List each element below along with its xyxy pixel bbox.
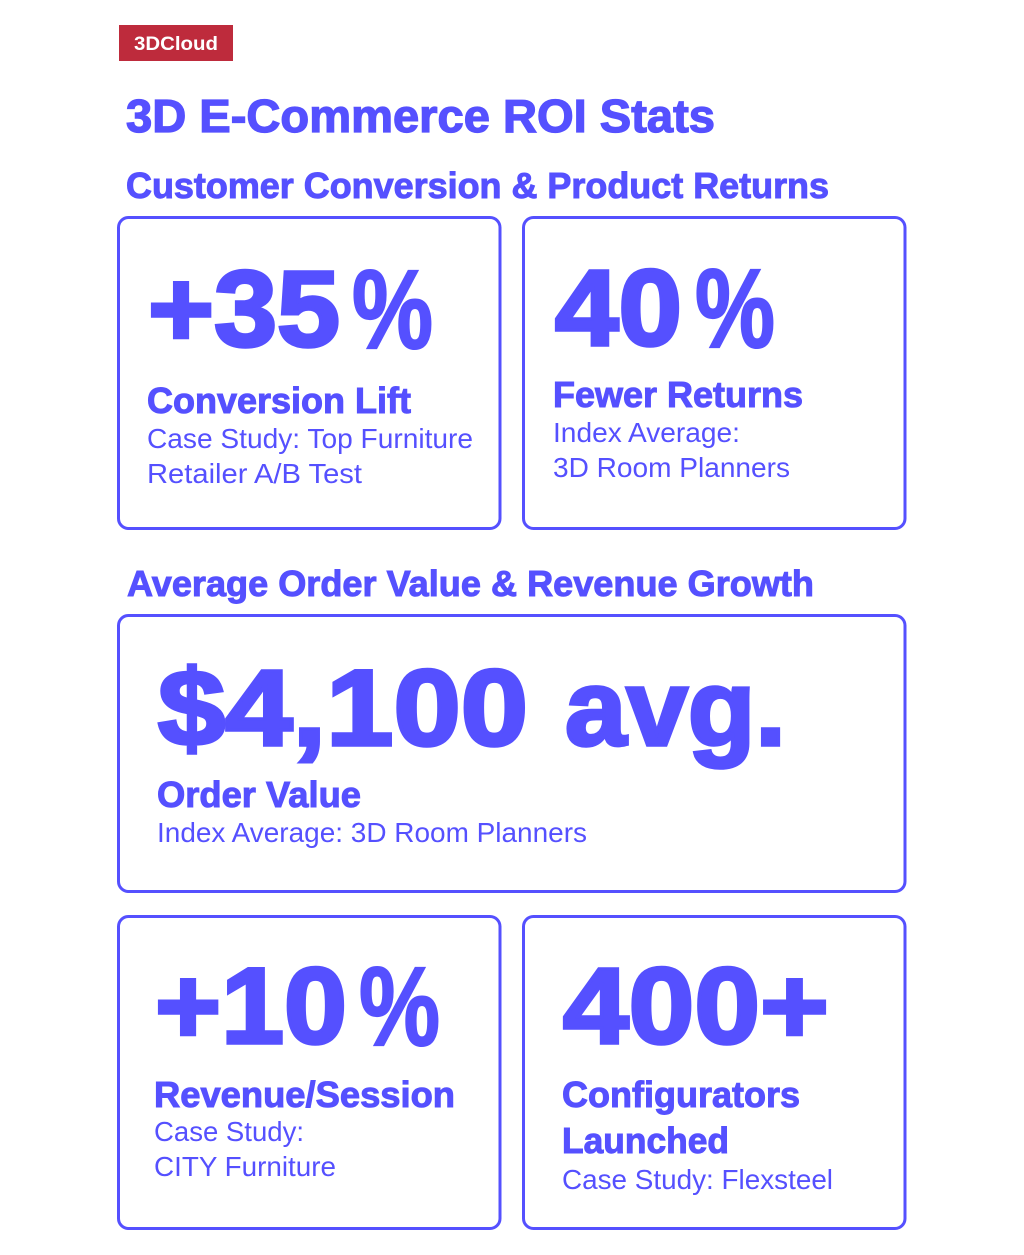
label: order value: Order Value <box>157 774 361 815</box>
description: conversion lift source: Case Study: Top Furniture <box>147 423 473 454</box>
label: fewer returns: Fewer Returns <box>553 374 803 415</box>
label: configurators launched <box>562 1074 800 1161</box>
stat: +35% <box>148 247 433 372</box>
panel: configurators launched <box>524 916 905 1228</box>
heading: average order value and revenue growth: Average Order Value & Revenue Growth <box>127 563 814 604</box>
panel: revenue per session <box>118 916 500 1228</box>
description: order value source: Index Average: 3D Room Planners <box>157 817 587 848</box>
description: fewer returns source <box>553 417 790 483</box>
label: configurators launched: Configurators <box>562 1074 800 1115</box>
description: fewer returns source: 3D Room Planners <box>553 452 790 483</box>
label: conversion lift: Conversion Lift <box>147 380 411 421</box>
description: conversion lift source <box>147 423 473 489</box>
label: configurators launched: Launched <box>562 1120 729 1161</box>
heading: customer conversion and product returns: Customer Conversion & Product Returns <box>126 165 829 206</box>
stat: 40% <box>555 246 775 371</box>
stat: +35%: +35 <box>148 248 340 369</box>
stat: $4,100 avg.: $4,100 <box>158 647 528 768</box>
stat: 400+: 400+ <box>563 945 829 1066</box>
stat: 40%: 40 <box>555 247 682 368</box>
stat: 40%: % <box>695 246 775 371</box>
stat: +10%: % <box>359 944 440 1069</box>
title: 3D E-Commerce ROI Stats <box>126 90 715 142</box>
logo: 3DCloud <box>119 25 233 61</box>
stat: +35%: % <box>352 247 433 372</box>
description: fewer returns source: Index Average: <box>553 417 740 448</box>
description: revenue per session source: CITY Furniture <box>154 1151 336 1182</box>
description: conversion lift source: Retailer A/B Test <box>147 458 362 489</box>
panel: fewer returns <box>524 218 905 528</box>
label: revenue/session: Revenue/Session <box>154 1074 455 1115</box>
description: revenue per session source: Case Study: <box>154 1116 304 1147</box>
description: revenue per session source <box>154 1116 336 1182</box>
panel: order value <box>118 616 905 892</box>
logo: 3DCloud: 3DCloud <box>134 34 218 55</box>
stat: $4,100 avg.: avg. <box>565 647 786 768</box>
stat: $4,100 avg. <box>158 647 786 768</box>
panel: conversion lift <box>118 218 500 528</box>
stat: +10% <box>155 944 440 1069</box>
description: configurators source: Case Study: Flexsteel <box>562 1164 833 1195</box>
stat: +10%: +10 <box>155 945 347 1066</box>
